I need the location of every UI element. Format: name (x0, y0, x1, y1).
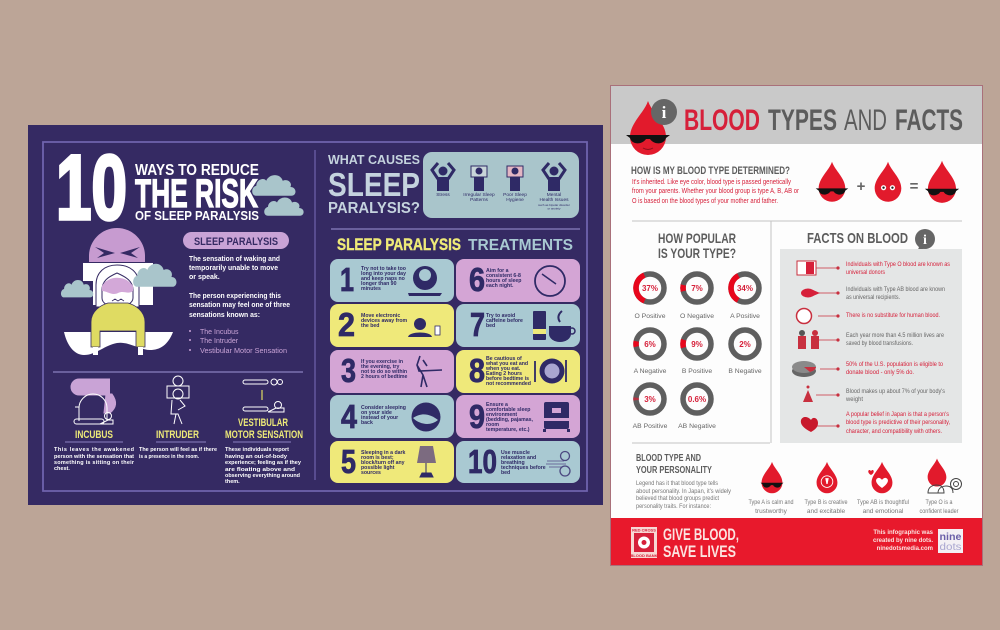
text: fact 5: 50% of the U.S. population is eligible to (846, 361, 943, 368)
label pill: sleep paralysis: SLEEP PARALYSIS (194, 236, 278, 248)
donut: B Positive 9% (680, 327, 714, 375)
panel: sleep paralysis infographic (28, 125, 603, 505)
title: 10 ways to reduce the risk: THE RISK (135, 172, 258, 216)
illustration: sleeping girl with intruder (61, 228, 176, 355)
text: fact 4: saved by blood transfusions. (846, 340, 913, 347)
heading: vestibular motor sensation: VESTIBULAR (238, 417, 288, 429)
donut: O Positive 37% (632, 270, 668, 320)
card: treatment 3: 3 (341, 352, 356, 389)
icon: info badge (651, 99, 677, 125)
personality: type B: and excitable (807, 508, 846, 515)
text: incubus description: something is sitting on their (54, 460, 135, 466)
donut: AB Positive 3%: 3% (644, 395, 656, 404)
list: three sensations: Vestibular Motor Sensation (200, 348, 287, 355)
title: 10 ways to reduce the risk: OF SLEEP PARALYSIS (135, 208, 259, 223)
title: 10 ways to reduce the risk: 10 (56, 137, 127, 239)
labels: causes: Stress (436, 192, 450, 198)
card: treatment 10: techniques before (501, 465, 546, 471)
text: definition of sleep paralysis: The person experiencing this (189, 293, 281, 300)
panel: blood types infographic (610, 86, 982, 566)
title: 10 ways to reduce the risk (56, 137, 259, 239)
title: blood types and facts: FACTS (895, 104, 963, 137)
heading: sleep paralysis treatments: SLEEP PARALYSIS (337, 235, 461, 254)
card: treatment 8: what you eat and (485, 361, 528, 367)
personality: type O: Type O is a (926, 499, 953, 506)
card: treatment 9: temperature, etc.) (486, 427, 530, 433)
text: fact 6: Blood makes up about 7% of your body's (846, 388, 945, 395)
card: treatment 3: If you exercise in (361, 359, 403, 365)
text: fact 6: weight (845, 396, 863, 403)
text: vestibular description: These individuals report (225, 447, 289, 453)
list: three sensations (189, 329, 287, 355)
slogan (663, 525, 739, 561)
card: treatment 2 (330, 304, 454, 347)
card: treatment 5: block/turn off any (361, 460, 405, 466)
donut: A Negative 6%: 6% (644, 340, 656, 349)
section: facts on blood: FACTS ON BLOOD (807, 230, 908, 247)
donut: B Positive 9%: B Positive (682, 368, 712, 375)
card: treatment 6: 6 (469, 261, 485, 298)
title: blood types and facts: TYPES (768, 104, 837, 137)
text: fact 1 (846, 261, 950, 276)
section: how popular is your type (632, 230, 764, 430)
card: treatment 8 (456, 350, 580, 393)
card: treatment 2: Move electronic (361, 313, 400, 319)
credit text (873, 530, 934, 552)
section: facts on blood (780, 229, 962, 443)
diagram: parents drops equation: = (910, 178, 919, 195)
label pill: sleep paralysis (183, 232, 289, 249)
donut: AB Positive 3% (633, 384, 668, 430)
section: how popular is your type: HOW POPULAR (658, 230, 736, 246)
card: treatment 1: and keep naps no (361, 276, 405, 282)
icon: blood bag (797, 261, 816, 275)
card: treatment 1: 1 (340, 261, 354, 298)
card: treatment 6: consistent 6-8 (486, 273, 521, 279)
labels: causes: Poor Sleep (503, 192, 527, 198)
card: treatment 10: Use muscle (501, 450, 530, 456)
card: treatment 3: 2 hours of bedtime (361, 374, 408, 380)
heading: sleep paralysis treatments (337, 235, 573, 254)
icon: vestibular motor sensation (243, 379, 284, 412)
personality: type A: trustworthy (755, 508, 788, 515)
card: treatment 7 (456, 304, 580, 347)
card: treatment 10: 10 (468, 443, 497, 480)
text: incubus description: This leaves the awakened (54, 447, 134, 453)
donut: O Negative 7%: 7% (691, 284, 703, 293)
card: treatment 2: the bed (361, 323, 379, 329)
section: how is my blood type determined (631, 165, 800, 205)
donut: AB Positive 3%: AB Positive (633, 423, 668, 430)
personality: type B (804, 462, 848, 515)
heading: vestibular motor sensation: MOTOR SENSATION (225, 429, 303, 441)
card: treatment 1: minutes (361, 286, 381, 292)
icon: mental health issues (543, 163, 565, 191)
text: fact 2: as universal recipients. (846, 294, 900, 301)
labels: causes: Hygiene (506, 197, 524, 203)
icon: mascot drop with sunglasses (626, 101, 670, 155)
icon: intruder (167, 376, 189, 424)
donut: AB Negative 0.6% (678, 385, 716, 430)
section: blood type and your personality (636, 452, 732, 510)
personality: type AB: Type AB is thoughtful (857, 499, 909, 506)
card: treatment 6 (456, 259, 580, 302)
heading: vestibular motor sensation (225, 417, 303, 442)
personality: type A (748, 462, 794, 515)
card: treatment 5: sources (361, 470, 381, 476)
heading: sleep paralysis treatments: TREATMENTS (468, 237, 573, 254)
card: treatment 6: hours of sleep (486, 278, 521, 284)
text: fact 5: donate blood - only 5% do. (846, 369, 914, 376)
text: definition of sleep paralysis: sensation may feel one of three (189, 302, 290, 309)
icon: ring (796, 308, 812, 324)
card: treatment 4: Consider sleeping (361, 405, 406, 411)
section: how is my blood type determined: from your parents. Whether your blood group is type A, B, AB or (632, 188, 800, 195)
credit text: created by nine dots. (873, 538, 933, 544)
card: treatment 8: Be cautious of (486, 356, 522, 362)
text: fact 7 (846, 411, 950, 435)
card: treatment 9: comfortable sleep (486, 407, 530, 413)
title: blood types and facts: AND (844, 104, 887, 137)
heading: what causes sleep paralysis: SLEEP (328, 166, 420, 203)
text: vestibular description: observing everything around (225, 473, 300, 479)
text: definition of sleep paralysis: or speak. (189, 274, 220, 281)
donut: A Positive 34%: 34% (737, 284, 753, 293)
icon: facts info badge (915, 229, 935, 252)
section: blood type and your personality: BLOOD TYPE AND (636, 452, 701, 464)
card: treatment 2: devices away from (361, 318, 408, 324)
section: blood type and your personality: personality traits. For instance: (636, 503, 711, 510)
text: fact 7: A popular belief in Japan is that a person's (846, 411, 949, 418)
donut: A Positive 34%: A Positive (730, 313, 760, 320)
header band (611, 86, 982, 155)
credit text: This infographic was (873, 530, 934, 536)
card: treatment 9 (456, 395, 580, 438)
title: blood types and facts (684, 104, 963, 137)
card: treatment 1: Try not to take too (361, 266, 406, 272)
text: fact 7: blood type is predictive of their personality, (846, 419, 950, 426)
icon: red cross badge (630, 527, 658, 558)
card: treatment 3: the evening, try (361, 364, 399, 370)
heading: what causes sleep paralysis: WHAT CAUSES (328, 152, 420, 167)
card: treatment 6: each night. (486, 283, 514, 289)
card: treatment 10: relaxation and (501, 455, 536, 461)
card: treatment 5 (330, 441, 454, 483)
section: blood type and your personality: Legend has it that blood type tells (636, 480, 719, 487)
card: treatment 3: not to do so within (361, 369, 407, 375)
text: fact 4: Each year more than 4.5 million lives are (846, 332, 944, 339)
card: treatment 7: caffeine before (486, 318, 523, 324)
section: blood type and your personality: about personality. In Japan, it's widely (636, 488, 732, 495)
card: treatment 5: room is best; (361, 455, 394, 461)
text: incubus description (54, 447, 135, 472)
donut: B Negative 2% (728, 330, 762, 375)
donut: B Positive 9%: 9% (691, 340, 703, 349)
panel: causes (423, 152, 579, 218)
text: fact 1: universal donors (846, 269, 885, 276)
text: fact 5 (846, 361, 943, 376)
card: treatment 7: 7 (470, 306, 485, 343)
slogan: SAVE LIVES (663, 542, 736, 561)
logo: nine dots: nine (940, 532, 962, 543)
donut: A Negative 6% (634, 328, 667, 375)
donut: AB Negative 0.6%: 0.6% (688, 395, 706, 404)
text: fact 7: character, and compatibility with others. (846, 428, 942, 435)
icon: facts info badge: i (923, 233, 927, 248)
card: treatment 9: (bedding, pajamas, (486, 417, 534, 423)
donut: A Negative 6%: A Negative (634, 368, 667, 375)
card: treatment 1: longer than 90 (361, 281, 397, 287)
diagram: parents drops equation (816, 161, 959, 203)
icon: heart (801, 417, 818, 432)
text: intruder description (139, 447, 217, 460)
credit text: ninedotsmedia.com (877, 546, 933, 552)
card: treatment 8: not recommended (486, 381, 531, 387)
card: treatment 1 (330, 259, 454, 302)
labels: causes: Mental (547, 192, 561, 198)
card: treatment 8: 8 (469, 352, 485, 389)
text: definition of sleep paralysis: sensations known as: (189, 312, 260, 319)
personality: type O (920, 458, 962, 515)
personality: type O: confident leader (920, 508, 959, 515)
icon: body silhouette (803, 386, 813, 402)
card: treatment 4: 4 (341, 398, 358, 435)
text: fact 2: Individuals with Type AB blood are known (846, 286, 945, 293)
section: how is my blood type determined: O is based on the blood types of your mother and father. (632, 198, 778, 205)
card: treatment 7: bed (486, 323, 495, 329)
section: blood type and your personality: YOUR PERSONALITY (636, 464, 712, 476)
text: intruder description: The person will feel as if there (139, 447, 217, 453)
donut: O Negative 7%: O Negative (680, 313, 714, 320)
text: fact 1: Individuals with Type O blood are known as (846, 261, 950, 268)
title: 10 ways to reduce the risk: WAYS TO REDUCE (135, 162, 259, 179)
card: treatment 10: breathing (501, 460, 525, 466)
labels: causes: Irregular Sleep (463, 192, 495, 198)
text: fact 3: There is no substitute for human blood. (846, 312, 940, 319)
card: treatment 9: room (486, 422, 499, 428)
donut: A Positive 34% (726, 269, 764, 320)
section: how popular is your type: IS YOUR TYPE? (658, 245, 736, 261)
icon: population disc (792, 361, 816, 377)
heading: intruder: INTRUDER (156, 429, 199, 441)
labels: causes: Health Issues (539, 197, 569, 203)
card: treatment 8: before bedtime is (486, 376, 529, 382)
card: treatment 5: Sleeping in a dark (361, 450, 406, 456)
donut: O Negative 7% (680, 271, 714, 320)
text: incubus description: chest. (54, 466, 70, 472)
card: treatment 3 (330, 350, 454, 393)
personality: type A: Type A is calm and (748, 499, 794, 506)
card: treatment 2: 2 (338, 306, 355, 343)
text: vestibular description: them. (225, 479, 240, 485)
card: treatment 10: bed (501, 470, 510, 476)
text: vestibular description (225, 447, 302, 485)
heading: what causes sleep paralysis: PARALYSIS? (328, 200, 420, 217)
card: treatment 1: long into your day (361, 271, 406, 277)
card: treatment 4: on your side (361, 410, 392, 416)
card: treatment 9: environment (486, 412, 517, 418)
card: treatment 4 (330, 395, 454, 438)
personality: type B: Type B is creative (804, 499, 848, 506)
icon: people (798, 330, 819, 349)
personality: type AB (857, 462, 909, 515)
text: incubus description: person with the sensation that (54, 454, 134, 460)
text: fact 6 (845, 388, 945, 403)
text: definition of sleep paralysis (189, 256, 290, 319)
card: treatment 9: Ensure a (486, 402, 508, 408)
heading: what causes sleep paralysis (328, 152, 420, 217)
card: treatment 10 (456, 441, 580, 483)
icon: title clouds (252, 175, 304, 216)
text: vestibular description: experience; feeling as if they (225, 460, 302, 466)
card: treatment 5: possible light (361, 465, 395, 471)
labels: causes: or anxiety (547, 206, 561, 210)
text: vestibular description: having an out-of-body (225, 454, 288, 460)
text: fact 2 (846, 286, 945, 301)
labels: causes (436, 192, 570, 210)
icon: info badge: i (662, 103, 667, 122)
donut: O Positive 37%: 37% (642, 284, 658, 293)
text: intruder description: is a presence in the room. (139, 454, 199, 460)
donut: O Positive 37%: O Positive (635, 313, 666, 320)
text: definition of sleep paralysis: temporarily unable to move (189, 265, 278, 272)
icon: red cross badge: RED CROSS (632, 528, 656, 532)
icon: poor sleep hygiene (507, 166, 523, 191)
card: treatment 7: Try to avoid (486, 313, 515, 319)
diagram: parents drops equation: + (857, 178, 866, 195)
text: definition of sleep paralysis: The sensation of waking and (189, 256, 280, 263)
personality: type AB: and emotional (863, 508, 904, 515)
icon: irregular sleep patterns (471, 166, 487, 191)
icon: incubus (71, 379, 116, 424)
donut: AB Negative 0.6%: AB Negative (678, 423, 716, 430)
donut: B Negative 2%: 2% (739, 340, 751, 349)
card: treatment 8: Eating 2 hours (486, 371, 522, 377)
title: blood types and facts: BLOOD (684, 104, 760, 137)
slogan: GIVE BLOOD, (663, 525, 739, 544)
icon: stress (432, 163, 454, 191)
card: treatment 8: when you eat. (485, 366, 521, 372)
text: vestibular description: are floating above and (225, 467, 295, 473)
labels: causes: such as bipolar disorder (538, 203, 570, 207)
footer: give blood banner (611, 518, 982, 565)
section: blood type and your personality: believed that blood groups predict (636, 495, 719, 502)
icon: blood drop sideways (801, 288, 820, 298)
list: three sensations: The Intruder (200, 338, 239, 345)
card: treatment 9: 9 (469, 398, 485, 435)
section: how is my blood type determined: HOW IS MY BLOOD TYPE DETERMINED? (631, 165, 790, 177)
list: three sensations: The Incubus (200, 329, 239, 336)
section: how is my blood type determined: It's inherited. Like eye color, blood type is passed genetically (632, 179, 791, 186)
icon: red cross badge: BLOOD BANK (630, 553, 658, 558)
card: treatment 4: instead of your (361, 415, 398, 421)
logo: nine dots (938, 529, 963, 553)
donut: B Negative 2%: B Negative (728, 368, 762, 375)
card: treatment 4: back (361, 420, 373, 426)
card: treatment 6: Aim for a (486, 268, 509, 274)
text: fact 4 (846, 332, 944, 347)
heading: incubus: INCUBUS (75, 429, 113, 441)
logo: nine dots: dots (940, 542, 962, 553)
card: treatment 5: 5 (341, 443, 356, 480)
labels: causes: Patterns (470, 197, 489, 203)
